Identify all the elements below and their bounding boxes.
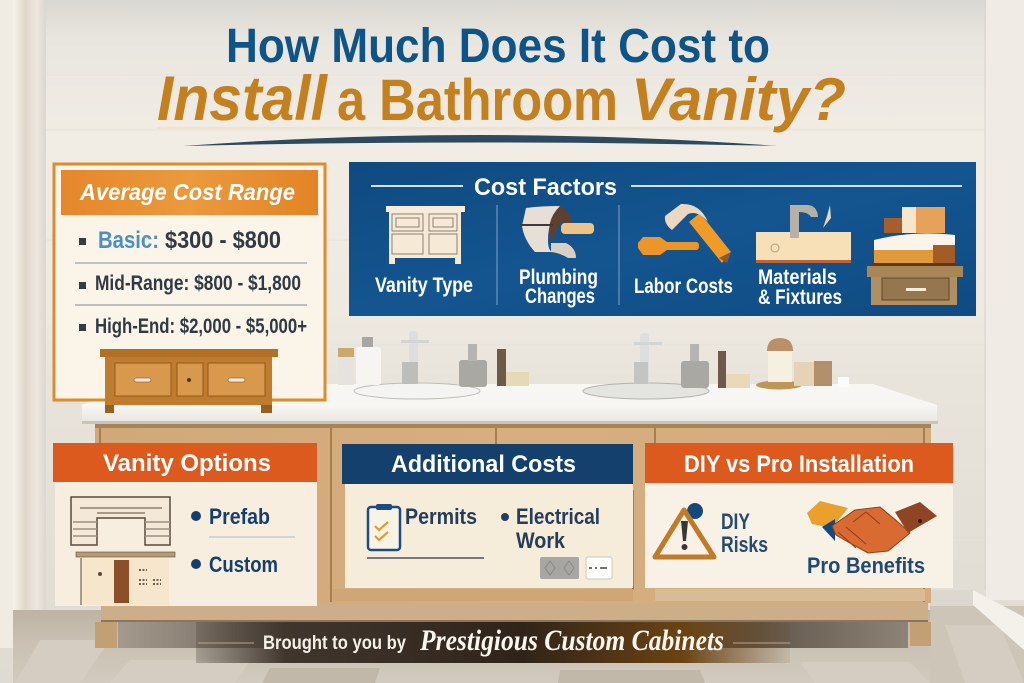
icon: vanity type cabinet	[386, 206, 465, 264]
label: materials and fixtures: & Fixtures	[758, 286, 842, 309]
label: diy risks: Risks	[721, 532, 768, 557]
panel: diy vs pro installation	[645, 443, 953, 588]
cost row: basic: Basic:	[98, 227, 159, 254]
title underline swoosh	[157, 128, 778, 146]
panel: average cost range	[54, 164, 325, 413]
icon: permits clipboard	[368, 504, 400, 550]
background: floor	[13, 590, 1024, 683]
icon: electrical outlets	[540, 557, 612, 579]
label: materials and fixtures: Materials	[758, 266, 837, 289]
icon: handshake	[807, 501, 937, 553]
icon: stacked fixtures on drawer	[867, 207, 963, 305]
label: electrical work: Electrical	[516, 504, 600, 529]
cabinet	[95, 420, 931, 648]
footer banner	[196, 622, 790, 663]
cost row: mid-range: Mid-Range: $800 - $1,800	[95, 272, 301, 295]
icon: plumbing pipe	[520, 206, 594, 258]
label: electrical work	[501, 504, 600, 553]
title	[157, 20, 846, 134]
label: diy risks	[721, 509, 768, 557]
cost row: basic: $300 - $800	[165, 227, 281, 254]
label: vanity type: Vanity Type	[375, 274, 473, 297]
panel: additional costs	[342, 444, 633, 588]
footer text: brought to you by: Brought to you by	[263, 633, 406, 654]
title: Vanity?	[631, 66, 846, 133]
panel: vanity options	[53, 443, 317, 606]
countertop	[82, 384, 938, 424]
title: How Much Does It Cost to	[226, 20, 770, 73]
heading: cost factors: Cost Factors	[474, 174, 617, 201]
icon: small wooden vanity	[100, 349, 278, 413]
label: labor costs: Labor Costs	[634, 275, 733, 298]
icon: prefab vanity outline	[71, 497, 170, 545]
title: Install	[157, 64, 328, 134]
label: plumbing changes: Plumbing	[519, 266, 598, 289]
cost row: basic	[79, 227, 281, 254]
footer text: company name: Prestigious Custom Cabinets	[419, 624, 724, 657]
list item: custom	[191, 552, 278, 577]
list item: custom: Custom	[209, 552, 278, 577]
heading: vanity options: Vanity Options	[103, 450, 271, 477]
label: diy risks: DIY	[721, 509, 750, 534]
label: pro benefits: Pro Benefits	[807, 553, 925, 578]
cost row: high-end: High-End: $2,000 - $5,000+	[95, 315, 307, 338]
background: curtain	[0, 0, 46, 648]
label: permits: Permits	[405, 504, 477, 529]
icon: custom vanity	[76, 552, 175, 605]
panel: cost factors	[349, 162, 976, 316]
sink and fixtures	[338, 331, 849, 399]
icon: warning triangle	[655, 503, 714, 557]
heading: diy vs pro installation: DIY vs Pro Installation	[684, 451, 914, 478]
label: plumbing changes	[519, 266, 598, 308]
heading: average cost range: Average Cost Range	[79, 179, 295, 205]
heading: additional costs: Additional Costs	[391, 451, 576, 478]
icon: materials and fixtures	[756, 205, 851, 263]
title: a Bathroom	[337, 68, 618, 133]
label: plumbing changes: Changes	[525, 285, 595, 308]
list item: prefab: Prefab	[209, 504, 270, 529]
label: electrical work: Work	[516, 528, 566, 553]
icon: hammer and wrench	[638, 204, 731, 263]
label: materials and fixtures	[758, 266, 842, 309]
